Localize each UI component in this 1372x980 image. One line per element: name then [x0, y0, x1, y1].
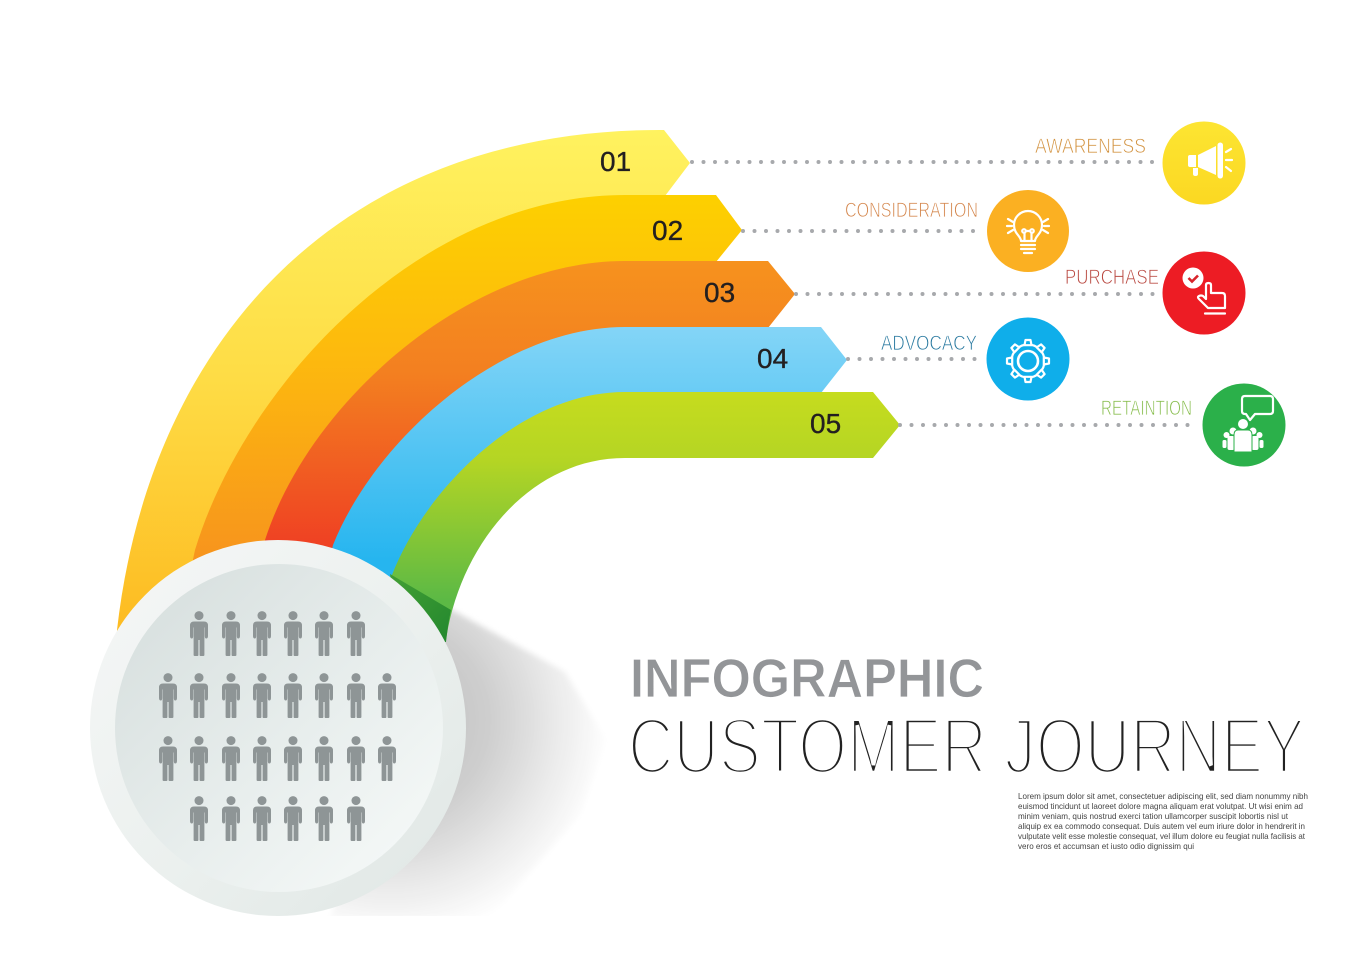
lorem ipsum paragraph	[1018, 791, 1308, 851]
label: purchase: PURCHASE	[1065, 266, 1159, 289]
band 02: amber arrow	[180, 195, 742, 620]
circle outer ring	[90, 540, 466, 916]
title: infographic: INFOGRAPHIC	[630, 647, 984, 709]
icon: light bulb	[987, 190, 1069, 272]
lorem ipsum paragraph: aliquip ex ea commodo consequat. Duis autem vel eum iriure dolor in hendrerit in	[1018, 821, 1305, 831]
band 01: yellow arrow	[117, 130, 690, 650]
lorem ipsum paragraph: euismod tincidunt ut laoreet dolore magna aliquam erat volutpat. Ut wisi enim ad	[1018, 801, 1303, 811]
step numbers: 04	[757, 343, 788, 374]
label: consideration: CONSIDERATION	[845, 199, 978, 222]
lorem ipsum paragraph: Lorem ipsum dolor sit amet, consectetuer adipiscing elit, sed diam nonummy nibh	[1018, 791, 1308, 801]
icon: megaphone	[1162, 122, 1246, 204]
icon: gear	[986, 318, 1070, 400]
step numbers	[600, 146, 841, 439]
band 05: green arrow	[380, 392, 900, 660]
label: advocacy: ADVOCACY	[881, 332, 977, 355]
lorem ipsum paragraph: vero eros et accumsan et iusto odio dignissim qui	[1018, 841, 1194, 851]
people grid	[159, 611, 396, 841]
step numbers: 05	[810, 408, 841, 439]
step numbers: 03	[704, 277, 735, 308]
step numbers: 01	[600, 146, 631, 177]
icon: purchase hand	[1162, 252, 1246, 334]
label: retaintion: RETAINTION	[1101, 397, 1192, 420]
dotted connector lines	[692, 162, 1197, 425]
label: awareness: AWARENESS	[1035, 135, 1146, 158]
lorem ipsum paragraph: minim veniam, quis nostrud exerci tation ullamcorper suscipit lobortis nisl ut	[1018, 811, 1289, 821]
circle inner disc	[115, 564, 443, 892]
step numbers: 02	[652, 215, 683, 246]
band 05 dark fold	[390, 574, 451, 642]
drop shadow behind circle	[337, 608, 589, 915]
band 04: blue arrow	[320, 327, 847, 600]
band 03: orange arrow	[255, 261, 795, 600]
lorem ipsum paragraph: vulputate velit esse molestie consequat, vel illum dolore eu feugiat nulla facilisis at	[1018, 831, 1306, 841]
icon: group with speech bubble	[1202, 384, 1286, 466]
